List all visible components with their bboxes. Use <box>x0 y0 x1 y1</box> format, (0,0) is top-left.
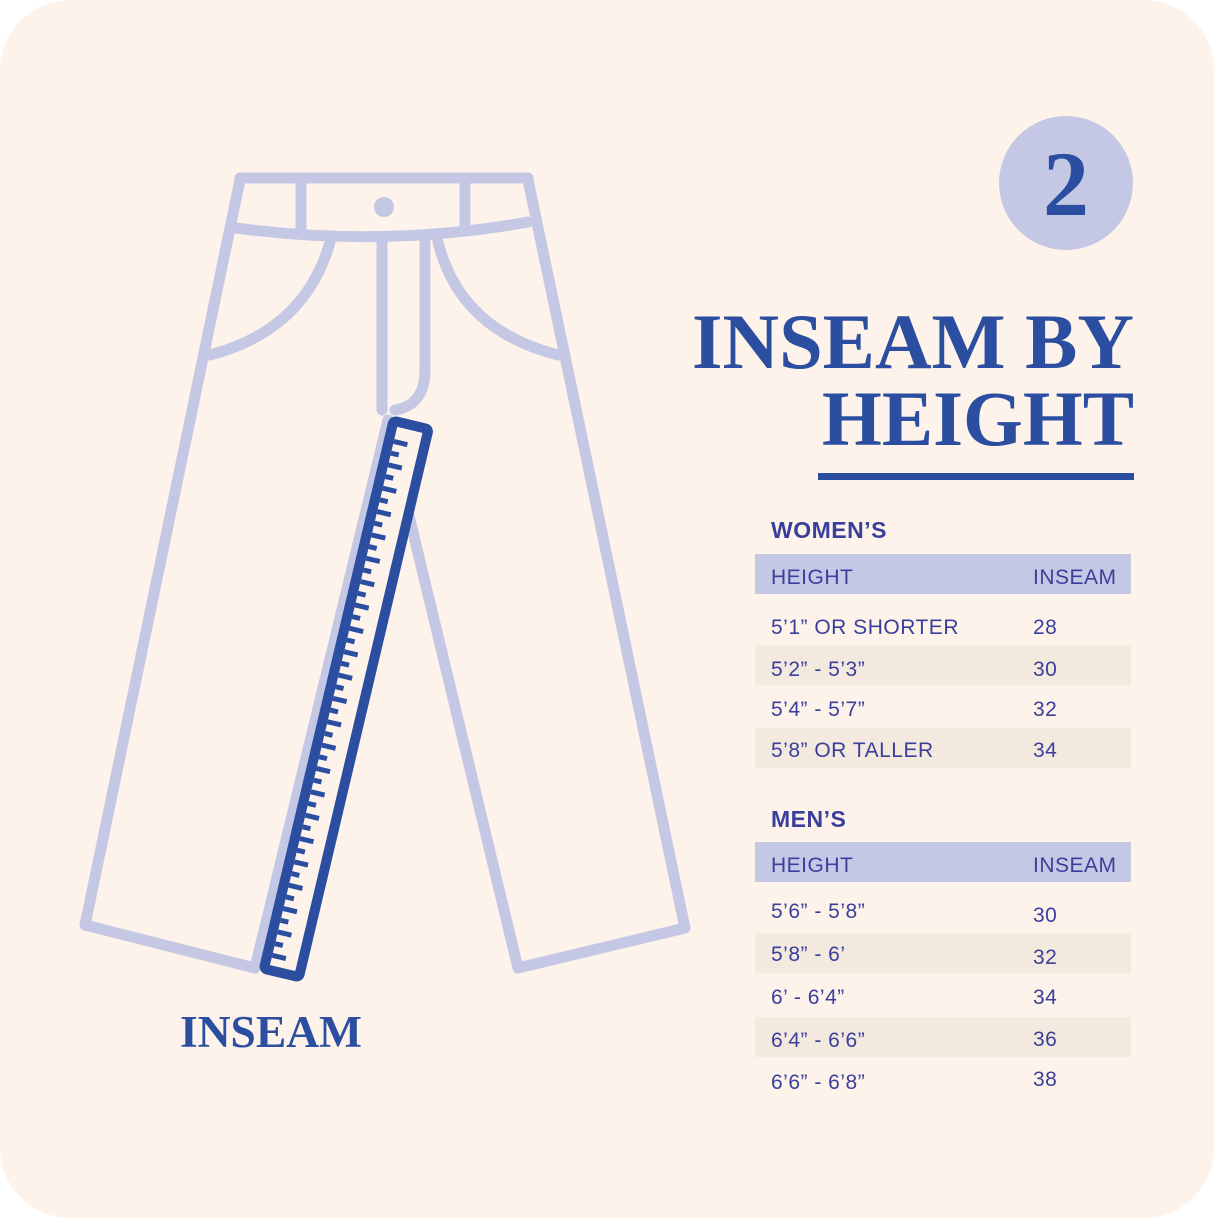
table: women's: 5’2” - 5’3” <box>771 658 865 681</box>
table: women's: INSEAM <box>1033 566 1117 589</box>
table: men's: INSEAM <box>1033 854 1117 877</box>
label: inseam: INSEAM <box>180 1007 362 1057</box>
table: women's: 28 <box>1033 616 1057 639</box>
badge: step number: 2 <box>1043 133 1089 235</box>
table: men's: 32 <box>1033 946 1057 969</box>
badge: step number <box>999 116 1133 250</box>
table: men's: 5’8” - 6’ <box>771 943 846 966</box>
table: men's: MEN’S <box>771 806 846 832</box>
table: men's: 6’6” - 6’8” <box>771 1071 865 1094</box>
table: men's: 6’ - 6’4” <box>771 986 845 1009</box>
table: men's: 6’4” - 6’6” <box>771 1029 865 1052</box>
table: women's: 30 <box>1033 658 1057 681</box>
title: HEIGHT <box>822 375 1134 462</box>
table: men's: 30 <box>1033 904 1057 927</box>
table: women's: HEIGHT <box>771 566 853 589</box>
table: men's: 38 <box>1033 1068 1057 1091</box>
table: men's: HEIGHT <box>771 854 853 877</box>
table: women's <box>755 517 1131 768</box>
table: women's: 34 <box>1033 739 1057 762</box>
title <box>692 298 1134 462</box>
table: women's: 5’1” OR SHORTER <box>771 616 959 639</box>
table: men's: 34 <box>1033 986 1057 1009</box>
table: men's <box>755 806 1131 1094</box>
table: women's: WOMEN’S <box>771 517 887 543</box>
table: men's: 5’6” - 5’8” <box>771 900 865 923</box>
title: INSEAM BY <box>692 298 1134 385</box>
table: men's: 36 <box>1033 1028 1057 1051</box>
table: women's: 5’4” - 5’7” <box>771 698 865 721</box>
illustration: pants <box>85 178 685 968</box>
icon: ruler <box>264 421 429 977</box>
table: women's: 32 <box>1033 698 1057 721</box>
table: women's: 5’8” OR TALLER <box>771 739 934 762</box>
